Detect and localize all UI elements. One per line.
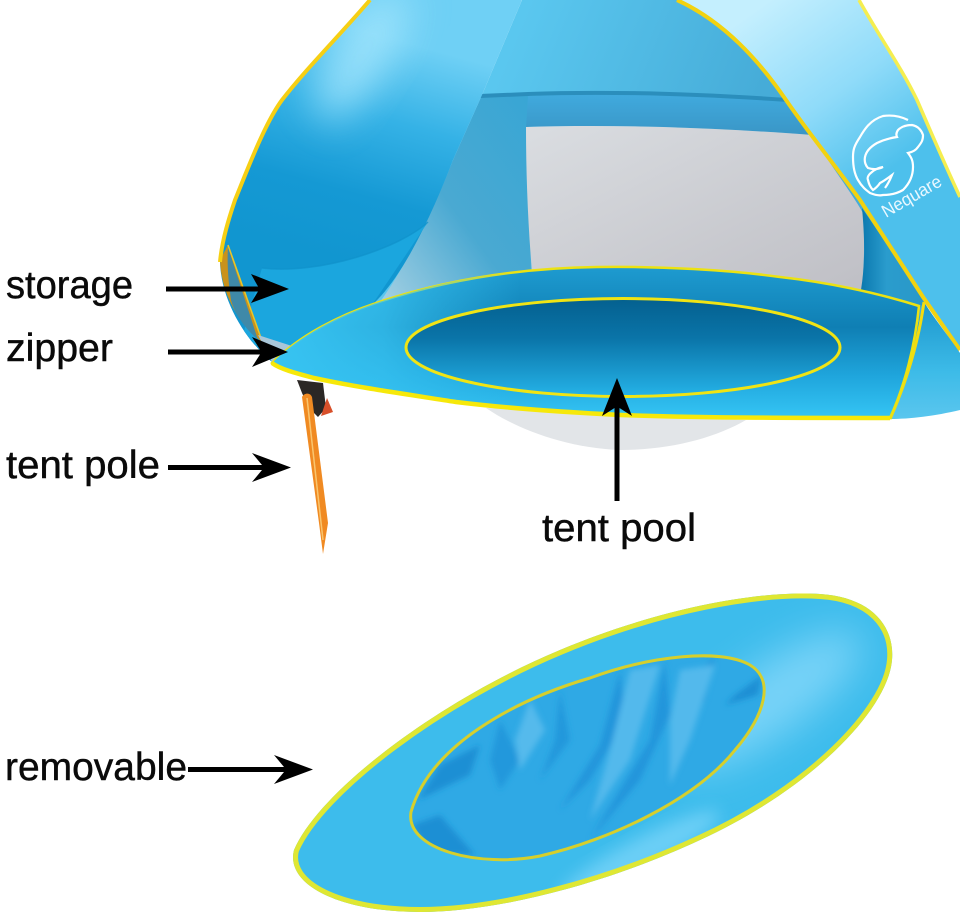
window seam [480, 93, 788, 100]
logo [853, 115, 945, 221]
grey mesh window [526, 126, 864, 290]
right inner dark strip [861, 208, 925, 308]
right lower panel [890, 302, 960, 419]
storage pocket [240, 222, 428, 345]
arrow: tent pool [602, 378, 632, 501]
upper window band [526, 94, 812, 135]
right band yellow edges [677, 0, 960, 350]
pole strap [297, 380, 326, 417]
inner pool fabric [411, 656, 764, 860]
arrow: storage [166, 274, 289, 303]
rim floor [272, 267, 919, 418]
label: tent pole: tent pole [6, 444, 160, 487]
rim bottom yellow edge [272, 363, 890, 418]
wrinkles [412, 655, 762, 855]
arrow: tent pole [168, 453, 291, 482]
highlight on fabric [700, 613, 877, 787]
brand name: Nequare [878, 171, 945, 221]
left side sliver [220, 245, 262, 342]
outer yellow edge [220, 0, 370, 262]
label: storage: storage [6, 264, 133, 307]
back interior panel [372, 0, 925, 340]
mesh side panel [370, 95, 531, 315]
right logo band [677, 0, 960, 350]
pool opening [406, 298, 840, 396]
removable pool floor [293, 593, 892, 912]
right lower panel yellow seam [890, 302, 924, 419]
label: zipper: zipper [6, 327, 113, 370]
zipper grey strip [258, 335, 295, 362]
arrow: zipper [168, 337, 288, 367]
tent underside pool bag [486, 408, 746, 450]
tent pole [302, 394, 328, 554]
tent [215, 0, 960, 554]
left storage shell [215, 0, 522, 362]
arrow: removable [188, 755, 313, 784]
label: removable: removable [5, 746, 187, 789]
label: tent pool: tent pool [542, 507, 696, 550]
